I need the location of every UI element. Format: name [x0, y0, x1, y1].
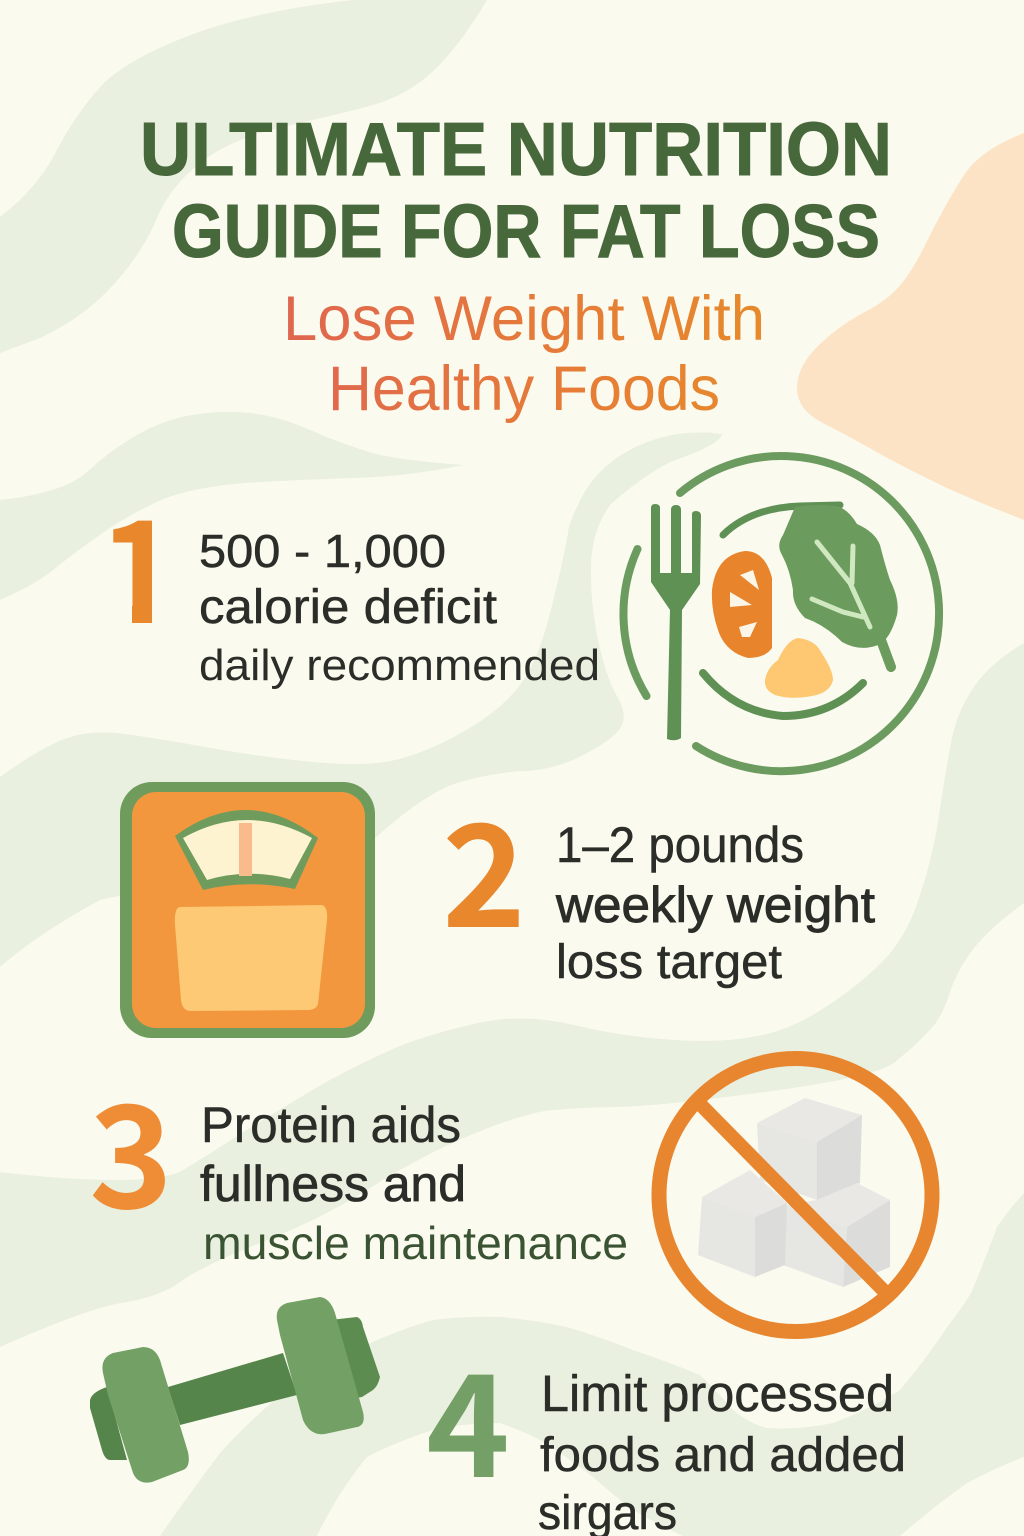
title: [140, 107, 892, 273]
title: ULTIMATE NUTRITION: [140, 107, 892, 191]
subtitle: Healthy Foods: [328, 354, 720, 424]
icon: plate with fork, leaf and food: [623, 456, 939, 771]
step 3 text: muscle maintenance: [203, 1217, 628, 1269]
subtitle: [283, 284, 765, 424]
step 1 text: daily recommended: [199, 641, 600, 690]
step 4 number: 4: [426, 1312, 510, 1518]
plate outer ring: [623, 456, 939, 771]
icon: dumbbell: [90, 1297, 380, 1483]
step 2 text: loss target: [556, 936, 782, 989]
step 3 number: 3: [89, 1043, 173, 1249]
step 4 text: Limit processed: [541, 1365, 894, 1422]
step 1 text: [199, 525, 600, 690]
icon: no sugar cubes: [659, 1058, 932, 1332]
orange slice: [712, 551, 772, 658]
spinach leaf: [779, 505, 898, 667]
subtitle: Lose Weight With: [283, 284, 765, 354]
prohibition sign: [659, 1058, 932, 1332]
background peach blob: [797, 133, 1024, 520]
icon: bathroom scale: [120, 782, 375, 1038]
step 1 text: 500 - 1,000: [199, 525, 446, 577]
step 1 number: 1: [98, 458, 182, 664]
step 2 text: 1–2 pounds: [556, 817, 804, 873]
yellow food: [765, 638, 833, 698]
step 2 text: [555, 817, 875, 989]
step 3 text: [200, 1097, 628, 1269]
step 2 number: 2: [442, 762, 526, 968]
fork: [651, 504, 701, 740]
title: GUIDE FOR FAT LOSS: [172, 189, 880, 273]
step 2 text: weekly weight: [555, 877, 875, 933]
scale dial: [175, 810, 318, 890]
step 3 text: fullness and: [200, 1156, 466, 1212]
step 4 text: [538, 1365, 906, 1536]
step 1 text: calorie deficit: [199, 581, 497, 634]
sugar cubes: [698, 1098, 890, 1287]
step 4 text: foods and added: [540, 1429, 906, 1482]
scale platform: [175, 905, 327, 1011]
step 3 text: Protein aids: [201, 1097, 461, 1153]
